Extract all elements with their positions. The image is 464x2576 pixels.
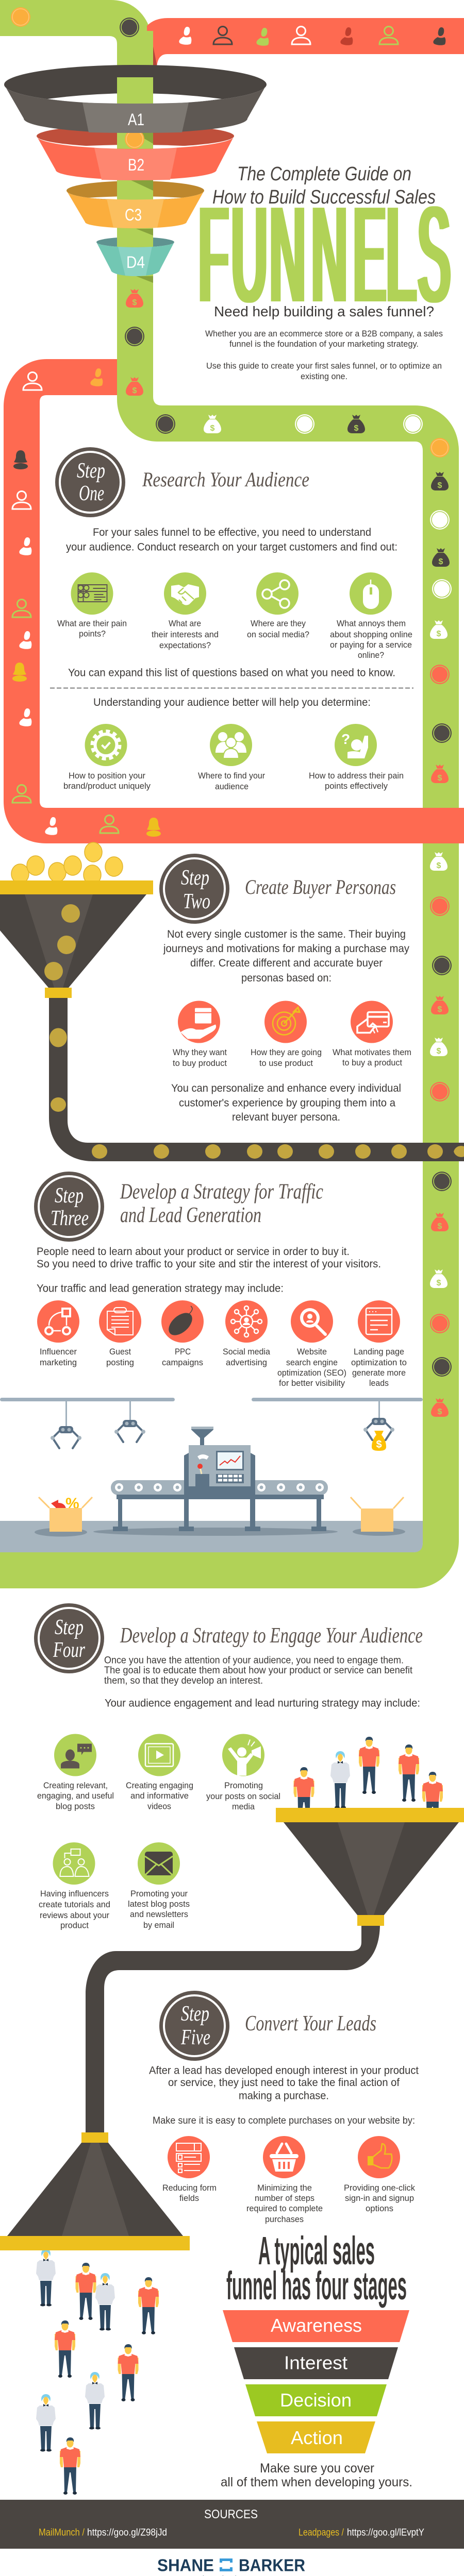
left box — [39, 1495, 92, 1532]
step three labels: posting — [106, 1358, 134, 1367]
stage: action — [257, 2421, 375, 2453]
step two labels — [173, 1047, 411, 1068]
step four labels row two: reviews about your — [40, 1910, 109, 1920]
step four intro: them, so that they develop an interest. — [104, 1675, 263, 1686]
icon: browser page — [358, 1300, 400, 1343]
step four labels row two: latest blog posts — [128, 1899, 190, 1909]
step three labels: Guest — [109, 1347, 131, 1357]
sources panel: SOURCES — [204, 2507, 258, 2521]
step two labels: to buy product — [173, 1058, 227, 1068]
green pipe through funnels — [117, 77, 153, 376]
icon: question hand: ? — [341, 731, 350, 747]
closing text — [221, 2461, 412, 2489]
step two heading: Create Buyer Personas — [245, 875, 396, 899]
icon: influencer flow — [37, 1300, 79, 1343]
step five labels: purchases — [265, 2214, 304, 2224]
rings and bags on green pipe: $ — [437, 1047, 441, 1056]
step five intro: or service, they just need to take the final action of — [168, 2077, 400, 2089]
step five labels — [162, 2183, 415, 2224]
step two labels: How they are going — [251, 1047, 322, 1057]
money bag in claw: $ — [376, 1439, 382, 1450]
rings and bags on green pipe: $ — [438, 481, 442, 490]
determine labels — [63, 771, 404, 791]
icon: magnifier — [291, 1300, 333, 1343]
people below lower funnel — [36, 2249, 159, 2495]
step three labels: generate more — [352, 1368, 406, 1378]
determine labels: How to address their pain — [309, 771, 404, 781]
red pipe: left and bottom — [4, 359, 464, 843]
step three labels: optimization to — [351, 1358, 407, 1367]
funnel D4 front: D4 — [126, 253, 145, 272]
question labels — [57, 618, 412, 660]
step five intro — [149, 2064, 419, 2126]
lower funnel — [0, 2132, 190, 2250]
step five badge: Five — [180, 2026, 210, 2049]
funnel B2 front: B2 — [128, 156, 144, 174]
coins above hopper — [11, 842, 123, 885]
step four labels row two: Having influencers — [40, 1889, 109, 1899]
logo — [157, 2556, 305, 2576]
sources panel — [0, 2500, 464, 2549]
step one intro: For your sales funnel to be effective, you need to understand — [93, 527, 371, 538]
icon: group — [210, 724, 252, 766]
icon: envelope — [138, 1842, 180, 1885]
step three labels: PPC — [175, 1347, 191, 1357]
step four badge: Step — [55, 1616, 84, 1639]
funnel B2 back — [37, 125, 234, 149]
funnel A1 front: A1 — [128, 110, 144, 129]
step four labels row one — [37, 1781, 280, 1811]
step four labels row one: videos — [147, 1801, 171, 1811]
rings and bags on green pipe: $ — [437, 1279, 441, 1287]
step two badge: Two — [183, 890, 210, 913]
coins in pipe — [44, 904, 464, 1159]
logo: SHANE — [157, 2556, 214, 2575]
step three intro: So you need to drive traffic to your site and stir the interest of your visitors. — [37, 1258, 381, 1270]
intro text: Use this guide to create your first sales funnel, or to optimize an — [206, 361, 442, 371]
logo: BARKER — [239, 2556, 305, 2575]
step four intro: Once you have the attention of your audience, you need to engage them. — [104, 1655, 404, 1666]
icon: question hand — [335, 724, 377, 766]
step four labels row two: create tutorials and — [39, 1900, 110, 1909]
funnel D4 front — [96, 242, 174, 276]
rings and bags on green pipe: $ — [438, 1222, 442, 1231]
step four labels row one: media — [232, 1802, 255, 1811]
step three intro: Your traffic and lead generation strategy may include: — [37, 1283, 284, 1294]
sources panel: MailMunch / — [39, 2528, 85, 2538]
step three labels: Social media — [223, 1347, 271, 1357]
funnel C3 front — [67, 191, 204, 228]
step two badge — [159, 854, 229, 924]
step five badge — [159, 1991, 229, 2061]
rings on top green pipe — [11, 7, 139, 37]
panel: step four — [34, 1603, 423, 1930]
step five labels: sign-in and signup — [345, 2193, 414, 2203]
icon: shopping basket — [263, 2136, 305, 2178]
icon: thumbs up — [358, 2136, 400, 2178]
rings and bags on green pipe: $ — [354, 424, 359, 433]
intro text: Need help building a sales funnel? — [214, 303, 434, 319]
machine — [111, 1427, 328, 1531]
intro text: Whether you are an ecommerce store or a B2B company, a sales — [205, 329, 443, 338]
step three heading: and Lead Generation — [120, 1204, 261, 1227]
icon: clipboard post — [99, 1300, 141, 1343]
step three labels: Influencer — [40, 1347, 77, 1357]
step two labels: Why they want — [173, 1047, 227, 1057]
sources panel: Leadpages / — [299, 2528, 344, 2538]
step two labels: to buy a product — [342, 1058, 402, 1067]
step four labels row two: by email — [143, 1920, 174, 1930]
expand text: You can expand this list of questions based on what you need to know. — [68, 667, 395, 679]
step three labels: leads — [369, 1378, 389, 1388]
step three labels: optimization (SEO) — [277, 1368, 346, 1378]
funnel D4 back — [96, 237, 174, 247]
determine labels: audience — [215, 782, 248, 791]
funnel C3 front: C3 — [125, 206, 142, 224]
step three labels: campaigns — [162, 1358, 203, 1367]
stage: action: Action — [291, 2427, 343, 2448]
question labels: What annoys them — [337, 618, 406, 629]
step four labels row one: Promoting — [224, 1781, 263, 1790]
icon: computer mouse — [161, 1300, 204, 1343]
step five labels: required to complete — [246, 2204, 323, 2213]
step three badge: Three — [51, 1207, 89, 1230]
step two closing text: customer's experience by grouping them into a — [179, 1097, 395, 1109]
step four badge: Four — [53, 1638, 85, 1662]
step two intro: differ. Create different and accurate buyer — [190, 957, 383, 969]
closing text: Make sure you cover — [260, 2461, 374, 2476]
funnel A1 back — [4, 65, 267, 105]
step two intro: personas based on: — [241, 972, 332, 984]
step two intro — [163, 928, 409, 984]
determine labels: points effectively — [325, 781, 388, 791]
title word: funnels: FUNNELS — [198, 175, 451, 334]
upper funnel with pipe — [86, 1808, 464, 2136]
icon: gear — [85, 724, 127, 766]
claw middle — [114, 1401, 145, 1442]
step three heading: Develop a Strategy for Traffic — [120, 1180, 323, 1204]
step three intro — [37, 1246, 381, 1294]
persons on top red pipe — [179, 27, 445, 46]
determine text: Understanding your audience better will help you determine: — [93, 697, 371, 708]
step five intro: making a purchase. — [239, 2090, 329, 2102]
step three labels: marketing — [40, 1358, 77, 1367]
icons on vertical green pipe: $ — [132, 298, 137, 307]
question labels: their interests and — [152, 630, 219, 639]
people on upper funnel — [294, 1737, 443, 1829]
ring behind funnel — [125, 129, 144, 149]
step two closing text — [171, 1082, 401, 1123]
right box — [351, 1497, 404, 1532]
rings and bags on green pipe: $ — [438, 1005, 442, 1014]
determine labels: Where to find your — [198, 771, 265, 781]
step four badge — [34, 1603, 104, 1673]
rings and bags on green pipe: $ — [210, 424, 215, 433]
icon: two influencers — [53, 1842, 95, 1885]
icon: video tablet — [138, 1734, 180, 1776]
stage: interest — [234, 2347, 398, 2379]
stage: decision — [245, 2384, 387, 2416]
step five heading: Convert Your Leads — [245, 2012, 376, 2036]
step three labels: advertising — [226, 1358, 267, 1367]
money bag in claw — [363, 1401, 394, 1451]
red pipe: top — [117, 18, 464, 93]
panel: step one — [50, 447, 413, 791]
closing text: all of them when developing yours. — [221, 2475, 412, 2489]
stage: awareness: Awareness — [271, 2315, 362, 2336]
sources panel: https://goo.gl/Z98jJd — [87, 2528, 167, 2538]
step two closing text: You can personalize and enhance every individual — [171, 1082, 401, 1094]
icon: gift card — [71, 572, 113, 615]
step three labels: for better visibility — [279, 1378, 345, 1388]
icon: form — [168, 2136, 210, 2178]
rings and bags on green pipe: $ — [438, 774, 442, 783]
step one heading: Research Your Audience — [142, 468, 309, 491]
panel: step five — [149, 1991, 419, 2224]
step three badge — [34, 1172, 104, 1242]
step two badge: Step — [181, 866, 209, 890]
question labels: online? — [358, 650, 384, 660]
step four labels row one: Creating relevant, — [43, 1781, 108, 1790]
icon: hand with box — [178, 1001, 220, 1043]
step five labels: Providing one-click — [344, 2183, 415, 2193]
question labels: What are their pain — [57, 618, 127, 629]
step five intro: After a lead has developed enough interest in your product — [149, 2064, 419, 2076]
intro text: funnel is the foundation of your marketing strategy. — [229, 339, 419, 349]
icon: mouse — [350, 572, 392, 615]
step five labels: fields — [179, 2193, 199, 2203]
step five labels: Minimizing the — [257, 2183, 312, 2193]
funnel B2 front — [37, 136, 234, 180]
panel: step three — [34, 1172, 407, 1388]
question labels: on social media? — [247, 630, 309, 639]
icon: target — [264, 1001, 307, 1043]
step three badge: Step — [55, 1184, 84, 1208]
hopper funnel with pipe — [0, 880, 464, 1161]
step three labels — [40, 1347, 407, 1388]
step four labels row two: and newsletters — [130, 1909, 188, 1919]
step one badge: Step — [77, 459, 105, 483]
question labels: What are — [169, 618, 201, 629]
factory scene — [0, 1398, 423, 1552]
title: The Complete Guide on — [237, 163, 411, 185]
step five labels: Reducing form — [162, 2183, 217, 2193]
icon: handshake — [164, 572, 206, 615]
funnel C3 back — [67, 181, 204, 200]
question labels: points? — [79, 629, 106, 639]
step four labels row two — [39, 1889, 190, 1930]
rings and bags on green pipe: $ — [437, 861, 441, 870]
heading: a typical sales funnel — [226, 2229, 407, 2308]
step two labels: What motivates them — [333, 1047, 411, 1057]
floor — [0, 1521, 423, 1552]
rings and bags on green pipe: $ — [439, 557, 443, 566]
intro text — [205, 303, 443, 381]
icon: speaker with bubble — [54, 1734, 96, 1776]
icon: credit card in hand — [351, 1001, 393, 1043]
icon: social network — [225, 1300, 268, 1343]
step three labels: Website — [297, 1347, 327, 1357]
icon: megaphone person — [222, 1734, 264, 1776]
icons on vertical green pipe — [125, 289, 144, 396]
claw left — [51, 1401, 81, 1448]
step four labels row one: engaging, and useful — [37, 1791, 114, 1801]
step two closing text: relevant buyer persona. — [232, 1111, 340, 1123]
stage: interest: Interest — [284, 2352, 347, 2374]
question labels: Where are they — [251, 618, 306, 629]
floor shadows — [35, 1528, 405, 1536]
step four intro: Your audience engagement and lead nurturing strategy may include: — [105, 1698, 420, 1709]
step one intro: your audience. Conduct research on your target customers and find out: — [66, 541, 397, 553]
step four labels row one: and informative — [130, 1791, 189, 1801]
step three intro: People need to learn about your product or service in order to buy it. — [37, 1246, 350, 1258]
question labels: or paying for a service — [330, 640, 412, 650]
step two intro: Not every single customer is the same. Their buying — [167, 928, 406, 940]
determine labels: How to position your — [69, 771, 145, 781]
icons on vertical green pipe: $ — [132, 386, 137, 395]
step four labels row two: Promoting your — [130, 1889, 188, 1899]
title — [212, 163, 436, 208]
icon: share — [256, 572, 299, 615]
rings and bags on green pipe: $ — [438, 1408, 442, 1416]
funnel A1 front — [4, 84, 267, 133]
step four labels row one: your posts on social — [206, 1791, 280, 1801]
stage: awareness — [223, 2310, 409, 2342]
step three labels: Landing page — [354, 1347, 404, 1357]
determine labels: brand/product uniquely — [63, 781, 151, 791]
stage: decision: Decision — [280, 2389, 352, 2411]
panel: step two — [159, 854, 411, 1123]
step three labels: search engine — [286, 1358, 338, 1367]
step five badge: Step — [181, 2002, 209, 2026]
left box: % — [65, 1495, 79, 1512]
question labels: about shopping online — [330, 630, 412, 639]
step five intro: Make sure it is easy to complete purchases on your website by: — [153, 2115, 415, 2126]
rings and bags on green pipe: $ — [437, 630, 441, 638]
step four labels row one: blog posts — [56, 1801, 95, 1811]
step one badge: One — [79, 482, 104, 505]
question labels: expectations? — [159, 640, 211, 650]
step one intro — [66, 527, 397, 553]
persons on left red pipe — [12, 368, 161, 837]
step four intro: The goal is to educate them about how your product or service can benefit — [104, 1665, 413, 1676]
step five labels: options — [366, 2204, 393, 2213]
overhead rails — [0, 1398, 423, 1401]
green pipe (main conveyor) — [0, 0, 459, 1588]
step one badge — [55, 447, 125, 517]
step two intro: journeys and motivations for making a purchase may — [163, 943, 409, 955]
step four intro — [104, 1655, 420, 1709]
step two labels: to use product — [259, 1058, 313, 1068]
step four labels row one: Creating engaging — [126, 1781, 193, 1790]
sources panel: https://goo.gl/lEvptY — [347, 2528, 424, 2538]
step three heading — [120, 1180, 323, 1227]
step four labels row two: product — [60, 1921, 89, 1930]
step five labels: number of steps — [255, 2193, 314, 2203]
rings and bags on green pipe — [156, 414, 452, 1417]
intro text: existing one. — [301, 371, 347, 381]
